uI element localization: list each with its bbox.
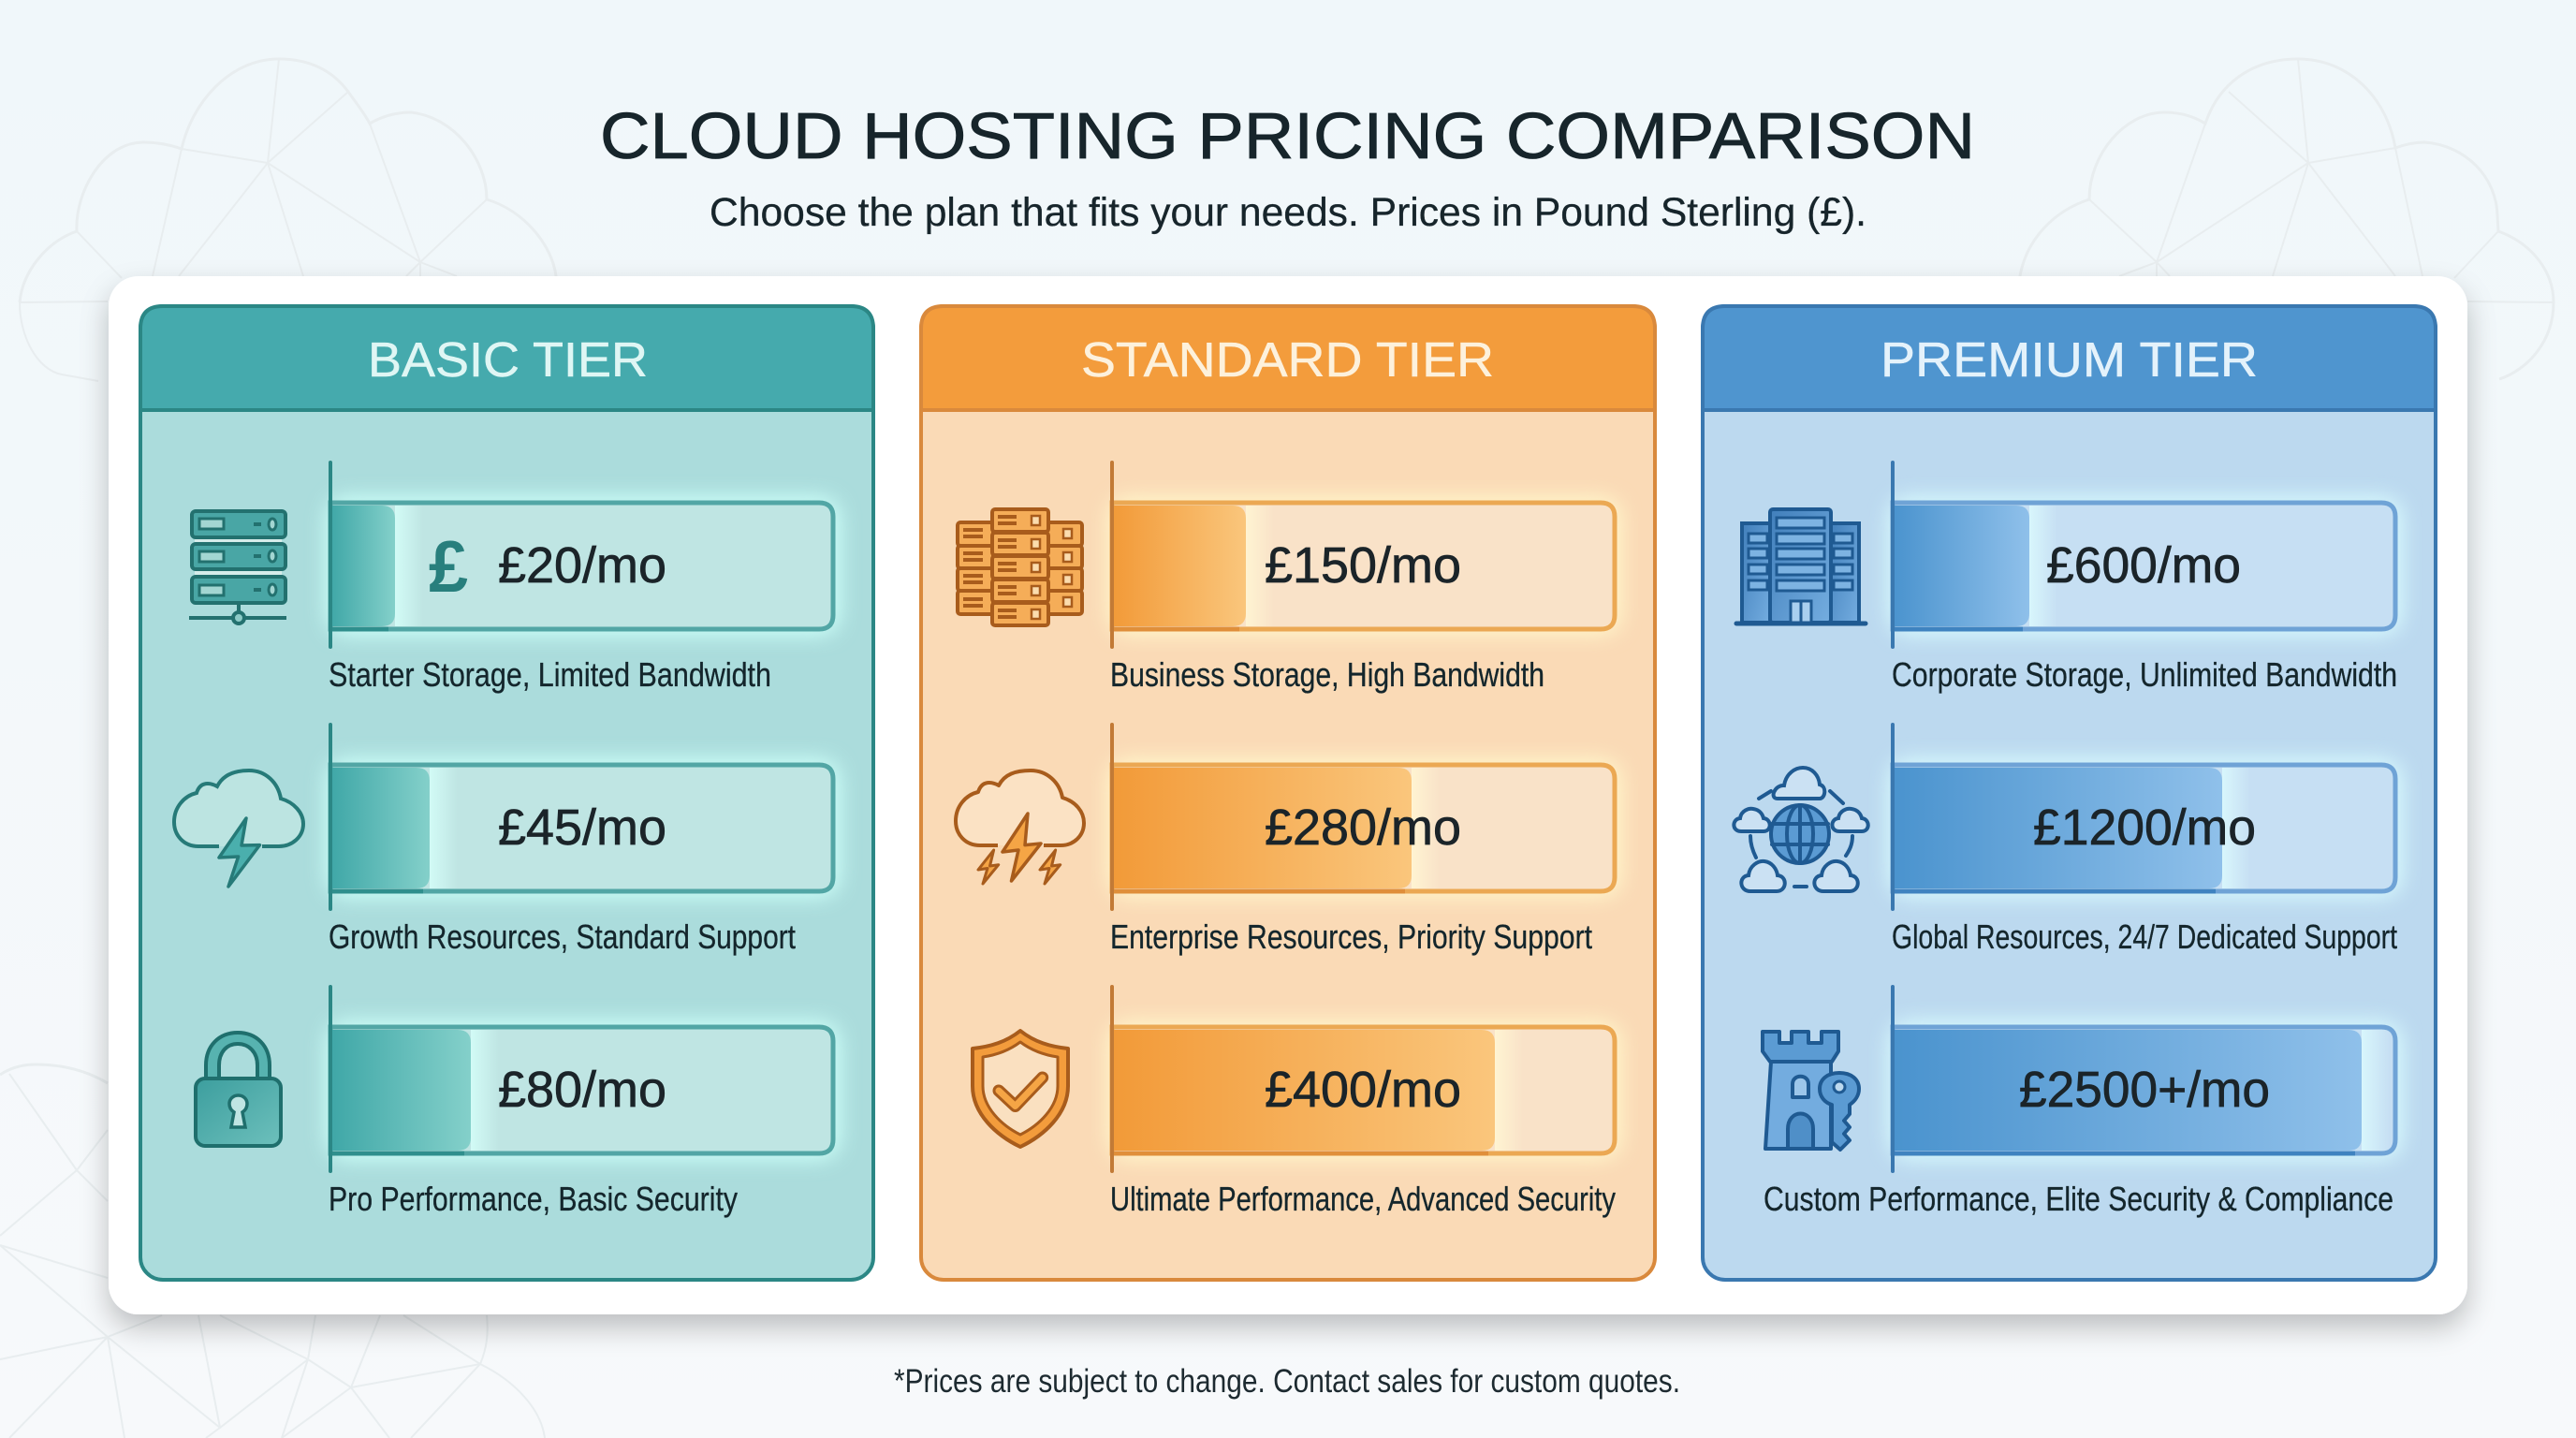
basic row 1: price bar: [329, 461, 836, 649]
standard row 1: price bar: [1110, 461, 1617, 649]
icon: tower with key: [1763, 1032, 1859, 1150]
basic header: BASIC TIER: [368, 333, 648, 388]
basic row 1: price bar: £: [429, 525, 468, 608]
standard row 2: description: Enterprise Resources, Priority Support: [1110, 917, 1592, 956]
title: CLOUD HOSTING PRICING COMPARISON: [600, 99, 1975, 172]
panel: premium tier: [1703, 306, 2436, 1280]
basic row 2: price bar: [329, 723, 836, 911]
standard row 1: description: Business Storage, High Bandwidth: [1110, 655, 1544, 694]
premium row 1: price bar: [1891, 461, 2398, 649]
premium row 1: price bar: £600/mo: [2046, 537, 2241, 594]
icon: corporate building: [1736, 509, 1866, 624]
standard row 3: price bar: [1110, 985, 1617, 1173]
basic row 2: description: Growth Resources, Standard Support: [329, 917, 796, 956]
icon: server rack cluster: [958, 509, 1082, 625]
footnote: *Prices are subject to change. Contact sales for custom quotes.: [894, 1363, 1680, 1400]
premium row 2: price bar: £1200/mo: [2033, 800, 2256, 856]
basic row 1: price bar: £20/mo: [498, 537, 666, 594]
basic row 3: price bar: [329, 985, 836, 1173]
icon: storm cloud: [956, 770, 1084, 884]
premium row 3: price bar: £2500+/mo: [2019, 1062, 2270, 1118]
premium row 2: price bar: [1891, 723, 2398, 911]
standard row 3: description: Ultimate Performance, Advanced Security: [1110, 1180, 1616, 1218]
premium row 2: description: Global Resources, 24/7 Dedicated Support: [1892, 917, 2397, 956]
icon: global cloud network: [1734, 768, 1868, 891]
basic row 2: price bar: £45/mo: [498, 800, 666, 856]
basic header: [140, 306, 873, 410]
standard header: [921, 306, 1655, 410]
background cloud mesh: bottom left: [0, 1064, 545, 1438]
panel: standard tier: [921, 306, 1655, 1280]
white card: [109, 276, 2467, 1314]
icon: server stack: [189, 511, 286, 624]
standard row 2: price bar: £280/mo: [1265, 800, 1461, 856]
premium row 1: description: Corporate Storage, Unlimited Bandwidth: [1892, 655, 2397, 694]
standard row 2: price bar: [1110, 723, 1617, 911]
standard row 1: price bar: £150/mo: [1265, 537, 1461, 594]
icon: shield with check: [973, 1031, 1068, 1147]
basic row 3: price bar: £80/mo: [498, 1062, 666, 1118]
subtitle: Choose the plan that fits your needs. Prices in Pound Sterling (£).: [710, 190, 1866, 235]
standard header: STANDARD TIER: [1081, 333, 1494, 388]
background cloud mesh: top left: [20, 59, 556, 381]
icon: padlock: [196, 1033, 281, 1146]
premium header: [1703, 306, 2436, 410]
basic row 3: description: Pro Performance, Basic Security: [329, 1180, 738, 1218]
basic row 1: description: Starter Storage, Limited Bandwidth: [329, 655, 771, 694]
icon: cloud with lightning: [174, 770, 303, 887]
background cloud mesh: top right: [2020, 59, 2554, 379]
standard row 3: price bar: £400/mo: [1265, 1062, 1461, 1118]
premium row 3: price bar: [1891, 985, 2398, 1173]
premium header: PREMIUM TIER: [1881, 333, 2258, 388]
premium row 3: description: Custom Performance, Elite Security & Compliance: [1764, 1180, 2393, 1218]
panel: basic tier: [140, 306, 873, 1280]
